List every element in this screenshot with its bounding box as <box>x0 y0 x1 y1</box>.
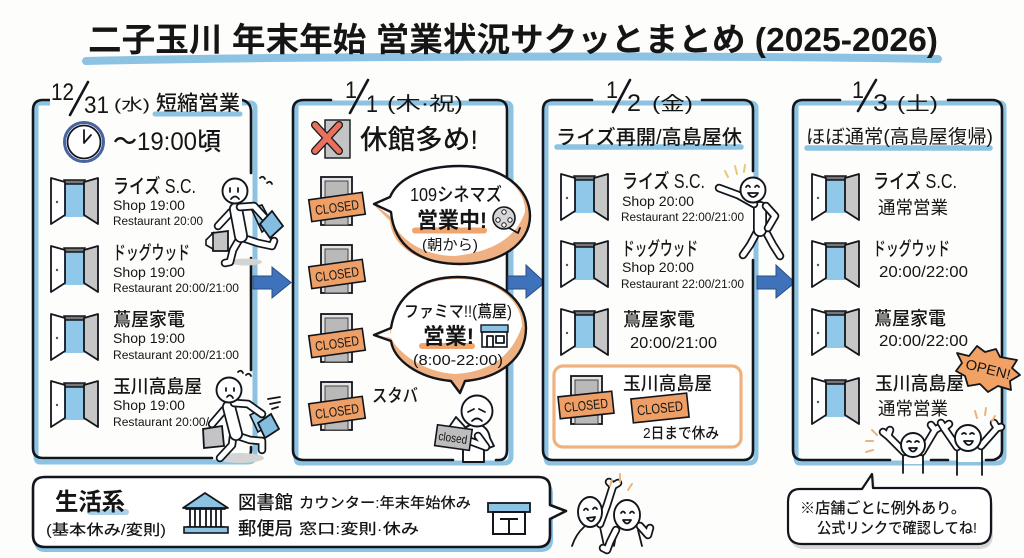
store row: 玉川高島屋: Restaurant 20:00/ <box>113 417 210 429</box>
speech bubble: 109 cinemas: (朝から) <box>422 237 478 254</box>
store row: 玉川高島屋: Shop 19:00 <box>113 398 185 413</box>
callout: check official links: ※店舗ごとに例外あり。 <box>800 499 966 517</box>
callout: check official links <box>788 474 993 549</box>
store row: 蔦屋家電 <box>812 308 968 355</box>
character: sad person with closed sign: closed <box>438 429 468 447</box>
closed door 3 <box>309 314 365 362</box>
heading: 1/2 date <box>606 77 693 117</box>
character: sad person with closed sign <box>435 396 494 462</box>
closed door 3: CLOSED <box>314 333 360 354</box>
character: running shopper bottom <box>203 371 280 463</box>
icon: film reel <box>493 207 520 233</box>
store row: 蔦屋家電: 20:00/21:00 <box>630 335 717 352</box>
heading: 12/31 date: (水) <box>114 96 150 114</box>
heading: daily services: 生活系 <box>55 489 125 516</box>
characters: cheering people <box>866 408 1001 475</box>
icon: convenience store <box>481 325 508 347</box>
heading: 12/31 date <box>50 78 242 119</box>
store row: 蔦屋家電: 蔦屋家電 <box>113 309 185 330</box>
store row: ライズ S.C.: Shop 20:00 <box>622 194 694 209</box>
store row: 玉川高島屋: 玉川高島屋 <box>875 373 964 394</box>
store row: ドッグウッド: Shop 19:00 <box>113 265 185 280</box>
closed door 1 <box>309 177 365 225</box>
heading: 12/31 date: 12 <box>51 79 74 106</box>
store row: 蔦屋家電: Restaurant 20:00/21:00 <box>113 350 239 362</box>
heading: 1/2 date: 1 <box>606 77 618 104</box>
closed door 4: スタバ: スタバ <box>372 386 418 406</box>
panel: 1/2 <box>543 77 780 463</box>
callout: Takashimaya closed <box>554 366 741 447</box>
heading: 1/3 date: 3 <box>873 90 888 117</box>
store row: ドッグウッド <box>561 238 744 291</box>
heading: 1/3 date: (土) <box>897 93 938 115</box>
callout: Takashimaya closed: 2日まで休み <box>643 425 719 442</box>
heading: mostly closed: 休館多め! <box>360 125 478 155</box>
panel: daily services <box>33 477 566 552</box>
store row: ドッグウッド: 20:00/22:00 <box>879 264 968 281</box>
store row: 蔦屋家電: 20:00/22:00 <box>879 333 968 350</box>
character: running shopper top <box>206 177 283 266</box>
speech bubble: FamilyMart: 営業! <box>423 324 474 349</box>
icon: clock <box>64 122 104 162</box>
store row: ドッグウッド: Restaurant 20:00/21:00 <box>113 283 239 295</box>
heading: 1/1 date <box>345 77 463 118</box>
heading: nearly normal: ほぼ通常(高島屋復帰) <box>806 126 993 148</box>
store row: 蔦屋家電: Shop 19:00 <box>113 331 185 346</box>
text: post office <box>238 518 419 539</box>
characters: celebrating friends <box>572 474 650 550</box>
store row: ライズ S.C.: Restaurant 20:00 <box>113 216 203 228</box>
callout: Takashimaya closed: 玉川高島屋 <box>623 373 712 394</box>
heading: 1/1 date: 1 <box>345 77 357 104</box>
text: library: 図書館 <box>238 492 293 513</box>
speech bubble: FamilyMart: ファミマ!!(蔦屋) <box>404 302 512 321</box>
store row: 蔦屋家電 <box>561 309 717 355</box>
store row: ドッグウッド <box>812 238 968 287</box>
store row: ドッグウッド: ドッグウッド <box>113 242 190 264</box>
heading: 1/2 date: 2 <box>627 90 641 117</box>
store row: 玉川高島屋 <box>812 373 964 424</box>
character: pointing person <box>719 165 780 256</box>
store row: 玉川高島屋 <box>51 376 210 429</box>
store row: ライズ S.C.: Shop 19:00 <box>113 198 185 213</box>
speech bubble: 109 cinemas <box>374 166 530 265</box>
text: post office: 郵便局 <box>238 518 293 539</box>
store row: ドッグウッド: Restaurant 22:00/21:00 <box>621 279 744 291</box>
store row: ライズ S.C. <box>51 175 203 228</box>
store row: ドッグウッド <box>51 242 239 295</box>
store row: 蔦屋家電: 蔦屋家電 <box>874 308 946 329</box>
arrow: 1/1 to 1/2 <box>508 265 545 298</box>
badge: OPEN! <box>956 346 1020 392</box>
icon: door with cross <box>315 120 350 158</box>
store row: ライズ S.C.: ライズ S.C. <box>113 175 196 198</box>
store row: 玉川高島屋: 玉川高島屋 <box>113 376 202 397</box>
closing time: 〜19:00頃 <box>113 128 221 156</box>
heading: 12/31 date: 短縮営業 <box>156 92 240 115</box>
closed door 4: スタバ <box>309 382 418 430</box>
arrow: 1/2 to 1/3 <box>757 265 795 298</box>
icon: library building <box>183 493 228 533</box>
callout: Takashimaya closed: CLOSED <box>636 398 684 418</box>
text: library: カウンター:年末年始休み <box>299 495 471 512</box>
closed door 1: CLOSED <box>314 197 360 218</box>
heading: 1/3 date <box>852 77 938 117</box>
store row: ドッグウッド: Shop 20:00 <box>622 260 694 275</box>
store row: 蔦屋家電: 蔦屋家電 <box>623 309 695 330</box>
speech bubble: FamilyMart: (8:00-22:00) <box>413 353 503 369</box>
arrow: 12/31 to 1/1 <box>253 267 291 298</box>
store row: 蔦屋家電 <box>51 309 239 362</box>
store row: ライズ S.C.: 通常営業 <box>878 198 948 218</box>
heading: 1/2 date: (金) <box>652 93 693 115</box>
heading: daily services <box>46 489 166 539</box>
heading: daily services: (基本休み/変則) <box>46 522 166 539</box>
callout: check official links: 公式リンクで確認してね! <box>817 520 977 537</box>
heading: 1/1 date: (木·祝) <box>387 93 463 115</box>
panel: 1/3 <box>793 77 1020 475</box>
store row: ドッグウッド: ドッグウッド <box>622 238 698 260</box>
heading: Rise reopens, Takashimaya closed: ライズ再開/高島屋休 <box>556 126 742 149</box>
store row: ライズ S.C. <box>561 170 744 224</box>
speech bubble: 109 cinemas: 営業中! <box>417 208 487 233</box>
badge: OPEN!: OPEN! <box>964 356 1012 382</box>
icon: post office <box>488 503 530 534</box>
heading: 1/3 date: 1 <box>852 77 864 104</box>
callout: Takashimaya closed: CLOSED <box>563 396 609 415</box>
store row: 玉川高島屋: 通常営業 <box>878 399 948 419</box>
store row: ライズ S.C.: Restaurant 22:00/21:00 <box>621 212 744 224</box>
text: library <box>238 492 471 513</box>
closed door 2 <box>309 245 365 293</box>
text: post office: 窓口:変則·休み <box>299 520 419 538</box>
heading: 12/31 date: 31 <box>84 92 109 119</box>
store row: ライズ S.C. <box>812 170 957 220</box>
heading: 1/1 date: 1 <box>366 91 378 118</box>
closed door 2: CLOSED <box>314 264 360 285</box>
speech bubble: FamilyMart <box>374 277 526 393</box>
store row: ライズ S.C.: ライズ S.C. <box>622 170 705 193</box>
store row: ライズ S.C.: ライズ S.C. <box>873 170 957 193</box>
title: 二子玉川 年末年始 営業状況サクッとまとめ (2025-2026) <box>88 21 938 58</box>
speech bubble: 109 cinemas: 109シネマズ <box>410 184 502 205</box>
closed door 4: スタバ: CLOSED <box>314 401 360 422</box>
panel: 12/31 <box>33 78 283 463</box>
store row: ドッグウッド: ドッグウッド <box>873 238 950 260</box>
panel: 1/1 <box>293 77 530 463</box>
